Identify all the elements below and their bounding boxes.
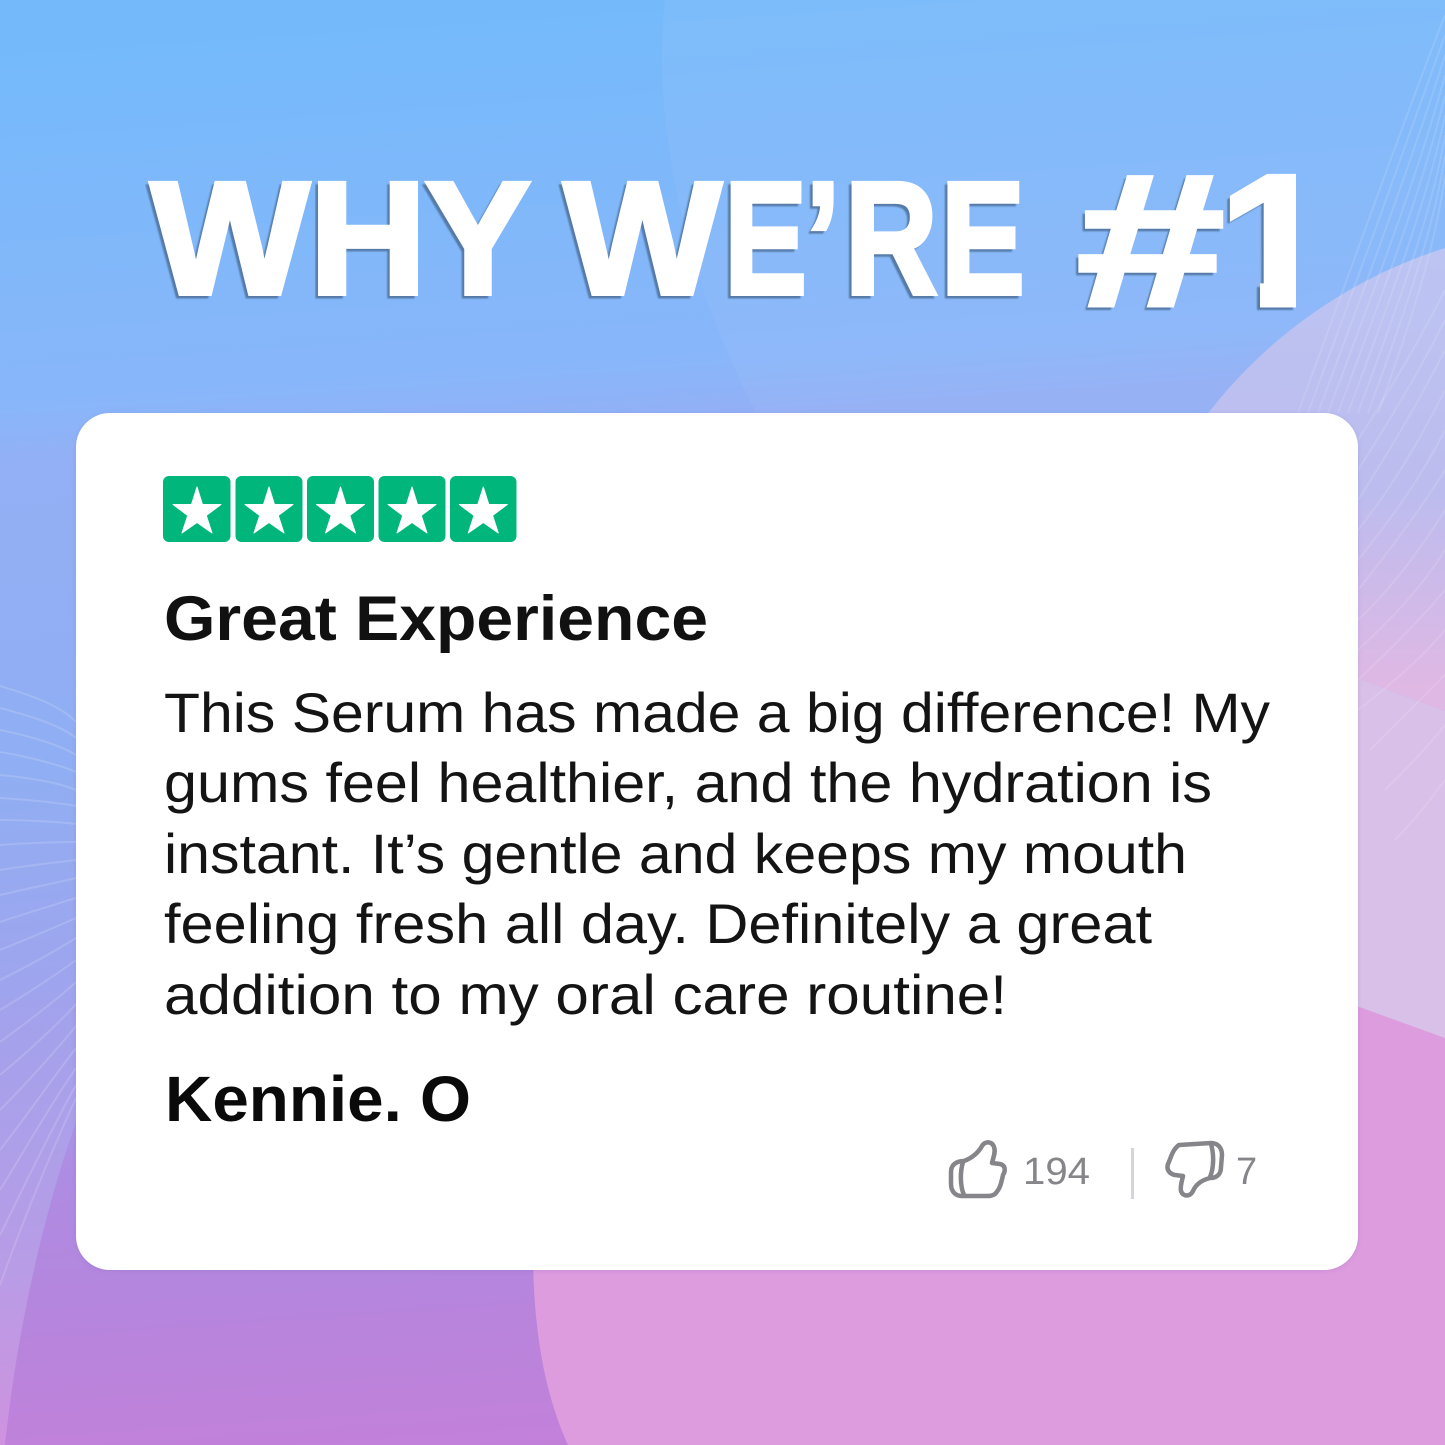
title shadow [145, 178, 1294, 311]
review body text: gums feel healthier, and the hydration is [164, 751, 1212, 814]
title text: E [724, 148, 807, 328]
title text: Y [426, 148, 529, 328]
card background [76, 413, 1358, 1270]
like count: 194 [1023, 1151, 1090, 1193]
background: left fine arcs [0, 686, 76, 1285]
title text: E [941, 148, 1025, 328]
title text: W [151, 148, 309, 328]
title text: 1 [1219, 136, 1333, 345]
reviewer name: Kennie. O [165, 1063, 471, 1135]
title shadow: # [1074, 139, 1221, 348]
star 2 [236, 476, 302, 542]
background: right pale band [1340, 672, 1445, 1040]
background: right circle [1203, 248, 1445, 711]
star 3 [307, 476, 374, 542]
title shadow: E [721, 152, 804, 330]
title shadow: 1 [1216, 139, 1330, 348]
divider [1131, 1148, 1134, 1199]
title text: ’ [806, 148, 840, 328]
dislike count: 7 [1236, 1151, 1257, 1193]
review body text: addition to my oral care routine! [164, 963, 1007, 1026]
title [145, 174, 1296, 311]
title shadow: W [561, 152, 718, 330]
star 5 [450, 476, 516, 542]
review card [76, 413, 1358, 1270]
background: bottom pink circle [533, 1000, 1445, 1445]
star 4 [378, 476, 446, 542]
icon: thumbs down [1167, 1143, 1222, 1196]
title shadow: R [842, 152, 934, 330]
title text: # [1077, 136, 1224, 345]
title text: R [845, 148, 937, 328]
title shadow: W [148, 152, 306, 330]
rating stars [163, 476, 516, 542]
review heading: Great Experience [164, 584, 708, 654]
title shadow: H [307, 152, 423, 330]
title text [148, 174, 1296, 308]
background: translucent top shape [662, 0, 1445, 420]
background: lower left band [0, 1000, 90, 1445]
background: right fine lines [1298, 15, 1445, 840]
title shadow: ’ [803, 152, 837, 330]
title shadow: E [938, 152, 1022, 330]
review body text: This Serum has made a big difference! My [164, 681, 1270, 744]
star 1 [163, 476, 230, 542]
title shadow: Y [422, 152, 526, 330]
title text: H [310, 148, 426, 328]
title text: W [564, 148, 721, 328]
review body text [164, 681, 1270, 1026]
review body text: feeling fresh all day. Definitely a great [164, 892, 1152, 955]
review body text: instant. It’s gentle and keeps my mouth [164, 822, 1187, 885]
icon: thumbs up [951, 1142, 1005, 1196]
